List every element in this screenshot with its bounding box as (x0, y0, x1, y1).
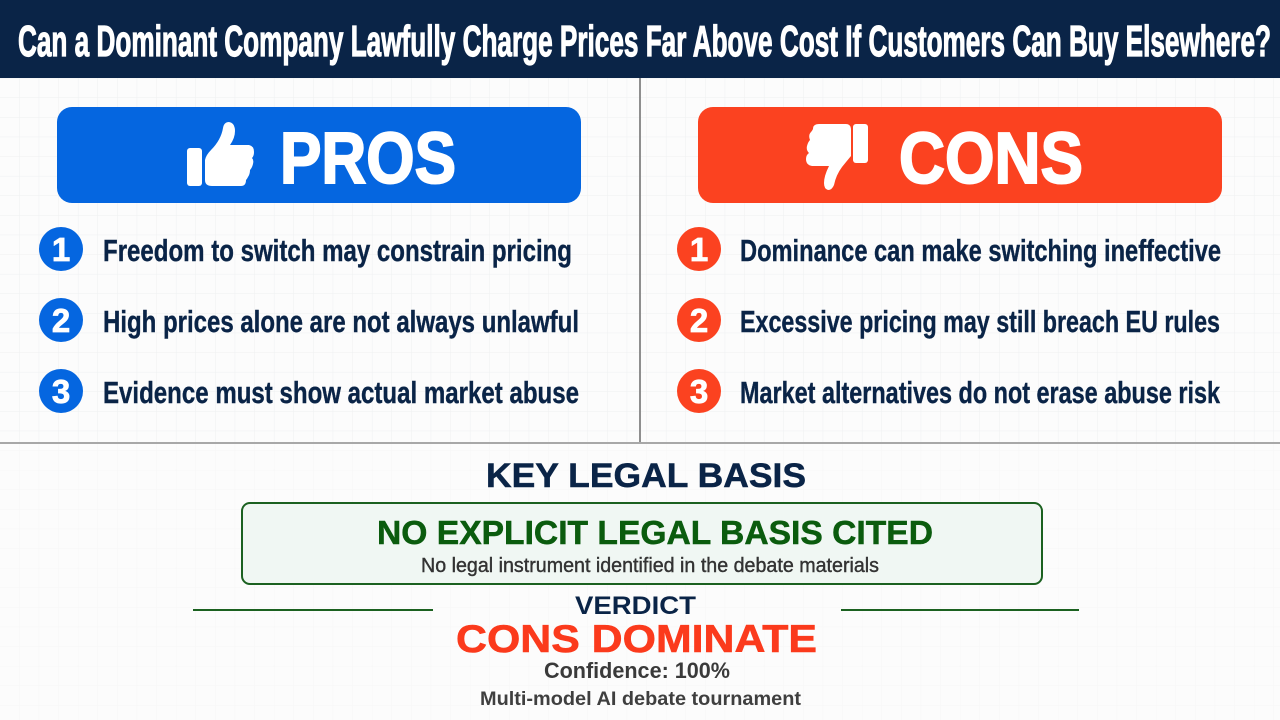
pros header (57, 107, 581, 203)
legal basis box: No legal instrument identified in the debate materials (421, 555, 879, 577)
pro point 1 (39, 227, 572, 271)
title banner (0, 0, 1280, 78)
panel: pros (39, 107, 581, 413)
legal basis box: NO EXPLICIT LEGAL BASIS CITED (377, 514, 933, 551)
pro point 1: 1 (52, 231, 70, 268)
icon: thumbs down (806, 124, 868, 190)
con point 3 (677, 369, 1221, 413)
legal basis box (242, 503, 1042, 584)
panel: cons (677, 107, 1222, 413)
pro point 2 (39, 298, 579, 342)
con point 1: 1 (690, 231, 708, 268)
verdict section: CONS DOMINATE (456, 618, 817, 661)
pros header: PROS (280, 119, 456, 199)
pro point 3: Evidence must show actual market abuse (103, 375, 579, 410)
pro point 3: 3 (52, 373, 70, 410)
con point 2: 2 (690, 302, 708, 339)
verdict section: VERDICT (575, 592, 696, 620)
con point 2 (677, 298, 1220, 342)
pro point 3 (39, 369, 579, 413)
verdict section (193, 592, 1079, 710)
con point 1 (677, 227, 1221, 271)
con point 3: 3 (690, 373, 708, 410)
cons header (698, 107, 1222, 203)
cons header: CONS (899, 119, 1083, 199)
pro point 1: Freedom to switch may constrain pricing (103, 233, 572, 268)
icon: thumbs up (187, 122, 254, 186)
pro point 2: 2 (52, 302, 70, 339)
pro point 2: High prices alone are not always unlawful (103, 304, 579, 339)
verdict section: Confidence: 100% (544, 658, 730, 683)
verdict section: Multi-model AI debate tournament (480, 689, 802, 710)
heading: key legal basis: KEY LEGAL BASIS (486, 457, 806, 495)
